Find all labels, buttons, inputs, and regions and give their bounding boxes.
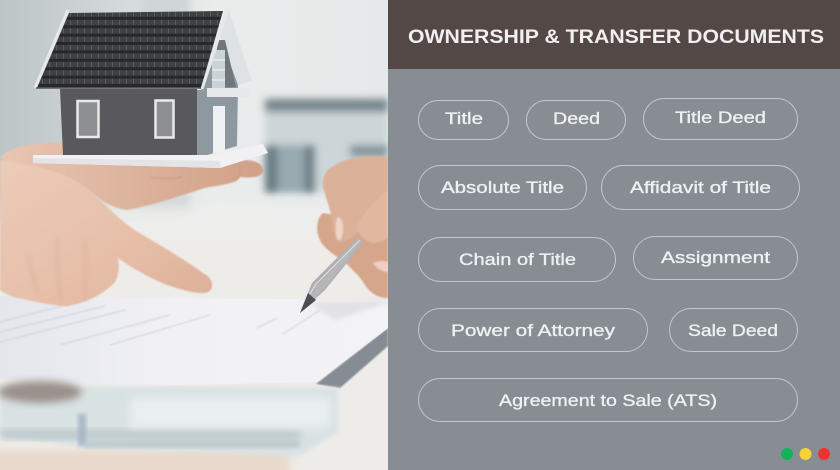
panel: photo of house model and document signing	[0, 0, 388, 470]
tag: Agreement to Sale (ATS): Agreement to Sale (ATS)	[499, 391, 717, 410]
tag: Affidavit of Title: Affidavit of Title	[630, 178, 771, 197]
title: OWNERSHIP & TRANSFER DOCUMENTS	[408, 26, 824, 48]
icon: traffic-light dots	[781, 448, 830, 460]
tag: Power of Attorney: Power of Attorney	[451, 321, 616, 340]
tag: Deed: Deed	[553, 109, 600, 128]
tag: Title Deed: Title Deed	[675, 108, 766, 127]
document text lines	[0, 304, 320, 345]
front wall	[60, 89, 197, 157]
panel: document terms	[388, 0, 840, 470]
tag: Title Deed	[644, 98, 798, 140]
pen	[300, 237, 363, 313]
tag: Title	[418, 100, 508, 140]
pointing hand	[0, 160, 212, 306]
tag: Sale Deed: Sale Deed	[688, 321, 778, 340]
tag: Absolute Title: Absolute Title	[441, 178, 564, 197]
desk surface	[0, 222, 388, 470]
writing hand	[317, 156, 388, 298]
blurred window background	[140, 0, 388, 213]
tag: Power of Attorney	[418, 308, 648, 352]
tag: Deed	[526, 100, 626, 140]
header band	[388, 0, 840, 69]
tag: Agreement to Sale (ATS)	[418, 378, 798, 422]
tag: Chain of Title: Chain of Title	[459, 250, 576, 269]
windows	[78, 101, 98, 137]
hand holding the house	[0, 143, 263, 210]
tag: Sale Deed	[670, 308, 798, 352]
icon: model house	[33, 8, 268, 168]
roof	[37, 11, 223, 88]
tag: Title: Title	[445, 109, 483, 128]
blurred banknotes	[0, 381, 338, 456]
tag: Chain of Title	[418, 238, 616, 282]
tag: Assignment: Assignment	[661, 248, 770, 267]
base	[33, 144, 268, 168]
tag: Affidavit of Title	[602, 166, 800, 210]
document paper	[316, 328, 388, 388]
house side and gable	[197, 36, 238, 158]
tag: Assignment	[634, 236, 798, 280]
tag: Absolute Title	[418, 166, 586, 210]
